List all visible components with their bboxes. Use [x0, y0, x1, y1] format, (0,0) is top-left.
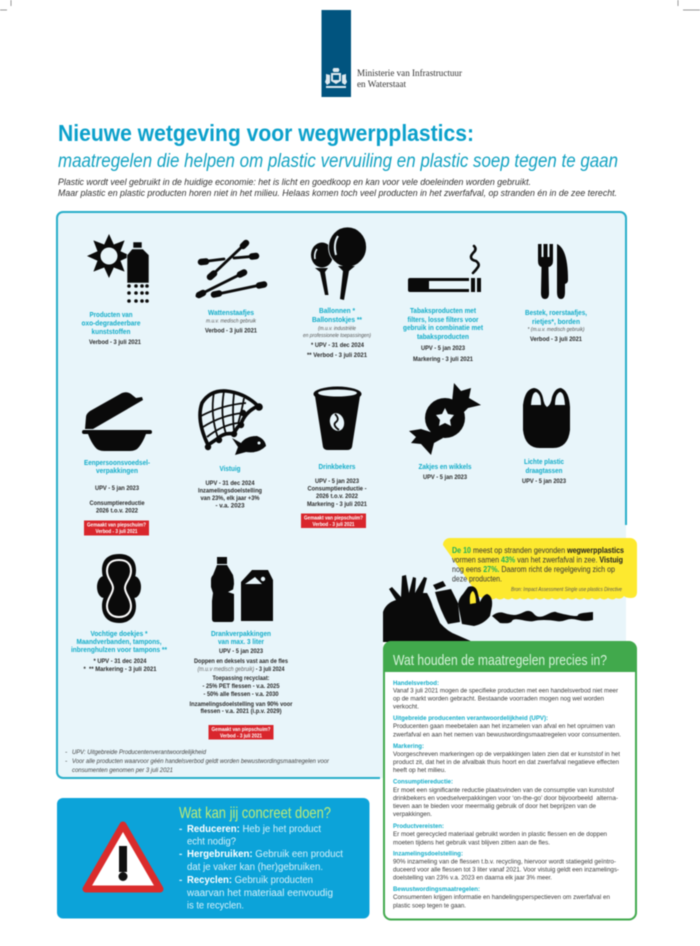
badge: styrofoam ban: Verbod - 3 juli 2021	[220, 734, 262, 740]
label: UPV - 5 jan 2023	[95, 485, 140, 492]
callout: top 10 beach litter: De 10 meest op stranden gevonden wegwerpplastics	[452, 546, 624, 555]
item: fishing gear	[198, 391, 266, 510]
label: tabaksproducten	[417, 332, 469, 341]
label: UPV - 5 jan 2023	[421, 345, 466, 352]
label: Eenpersoonsvoedsel-	[84, 458, 150, 467]
section: awareness measures: plastic soep tegen te gaan.	[393, 902, 466, 910]
icon: warning triangle	[86, 825, 160, 889]
callout: top 10 beach litter	[443, 538, 637, 600]
icon: fork and knife	[538, 244, 568, 299]
badge: styrofoam ban: Gemaakt van piepschuim?	[212, 727, 270, 733]
item: packets and wrappers	[409, 383, 481, 481]
label: kunststoffen	[92, 327, 131, 336]
label: Markering - 3 juli 2021	[307, 501, 368, 508]
section: consumption reduction: tieven aan te bieden voor meermalig gebruik of door het beprijzen van de	[393, 803, 596, 810]
label: - 25% PET flessen - v.a. 2025	[202, 683, 280, 690]
section: product requirements: moeten tijdens het gebruik vast blijven zitten aan de fles.	[393, 840, 550, 846]
action list: echt nodig?	[187, 836, 236, 848]
section: consumption reduction: Er moet een significante reductie plaatsvinden van de consumptie van kunststof	[393, 787, 614, 794]
ministry name: en Waterstaat	[357, 79, 406, 89]
action list: Recyclen: Gebruik producten	[187, 875, 313, 886]
ministry name: Ministerie van Infrastructuur	[357, 68, 462, 78]
badge: styrofoam ban: Gemaakt van piepschuim?	[87, 522, 146, 528]
label: Bestek, roerstaafjes,	[525, 308, 587, 317]
item: oxo-degradable plastics	[82, 234, 149, 346]
action list: dat je vaker kan (her)gebruiken.	[187, 862, 323, 873]
heading: Wat kan jij concreet doen?	[179, 805, 331, 822]
item: wipes and sanitary products	[71, 554, 167, 673]
panel heading: Wat houden de maatregelen precies in?	[393, 652, 607, 669]
item: food containers	[82, 392, 152, 536]
label: Ballonstokjes **	[312, 315, 362, 324]
badge: styrofoam ban	[84, 520, 149, 536]
item: cutlery	[525, 244, 587, 343]
label	[303, 306, 371, 359]
callout: top 10 beach litter: deze producten.	[452, 574, 502, 584]
icon: sanitary pad	[97, 554, 141, 623]
label: oxo-degradeerbare	[82, 318, 140, 328]
icon: cup	[314, 386, 362, 450]
label: Verbod - 3 juli 2021	[89, 339, 142, 346]
section: consumption reduction: Consumptiereductie:	[393, 778, 453, 786]
ministry name	[357, 68, 462, 89]
label: UPV - 5 jan 2023	[315, 478, 360, 485]
label: Ballonnen *	[319, 306, 355, 315]
icon: coat of arms	[325, 68, 347, 88]
action list	[179, 824, 343, 912]
label: en professionele toepassingen)	[303, 333, 371, 339]
label	[522, 457, 567, 485]
label: verpakkingen	[96, 466, 138, 475]
label	[307, 462, 368, 508]
section: awareness measures	[393, 886, 610, 910]
callout: top 10 beach litter: vormen samen 43% van het zwerfafval in zee. Vistuig	[452, 556, 623, 564]
label: Doppen en deksels vast aan de fles	[194, 658, 288, 665]
action list: waarvan het materiaal eenvoudig	[186, 888, 333, 899]
callout: top 10 beach litter: Bron: Impact Assessment Single use plastics Directive	[511, 587, 622, 593]
label: Maandverbanden, tampons,	[76, 637, 162, 646]
item: drinking cups	[301, 386, 368, 528]
panel: what can you do	[57, 798, 370, 918]
section: marking: Voorgeschreven markeringen op de verpakkingen laten zien dat er kunststof in het	[393, 751, 620, 758]
label	[84, 458, 150, 514]
label: Drankverpakkingen	[211, 629, 271, 638]
label: * UPV - 31 dec 2024	[94, 658, 147, 665]
icon: net and fish	[200, 391, 266, 455]
label	[403, 306, 483, 363]
item: plastic carrier bags	[522, 388, 570, 485]
section: awareness measures: Consumenten krijgen informatie en handelingsperspectieven om zwerfafval en	[393, 894, 610, 901]
section: collection target: 90% inzameling van de flessen t.b.v. recycling, hiervoor wordt statiegeld geïntro-	[393, 858, 616, 866]
footnotes: UPV: Uitgebreide Producentenverantwoordelijkheid	[72, 749, 206, 756]
label	[205, 308, 258, 334]
label: Inzamelingsdoelstelling van 90% voor	[190, 701, 293, 708]
label: UPV - 5 jan 2023	[219, 648, 264, 655]
label: ** Verbod - 3 juli 2021	[307, 352, 368, 359]
label: Producten van	[90, 310, 133, 319]
intro text	[58, 176, 617, 198]
label	[190, 629, 293, 715]
label: 2026 t.o.v. 2022	[96, 508, 139, 514]
panel: what the measures mean	[384, 642, 636, 920]
section: trade ban: Handelsverbod:	[393, 680, 439, 687]
footnotes: consumenten genomen per 3 juli 2021	[72, 767, 173, 774]
badge: styrofoam ban: Gemaakt van piepschuim?	[304, 516, 363, 522]
section: extended producer responsibility: zwerfafval en aan het nemen van bewustwordingsmaatregelen voor consumenten.	[393, 732, 621, 738]
item: balloons	[303, 227, 371, 359]
label: * ** Markering - 3 juli 2021	[84, 666, 157, 673]
section: marking: product zit, dat het in de afvalbak thuis hoort en dat zwerfafval negatieve effecten	[393, 759, 619, 766]
badge: styrofoam ban	[208, 725, 274, 740]
section: trade ban: verkocht.	[393, 704, 419, 710]
label: Drinkbekers	[318, 462, 356, 471]
section: consumption reduction: verpakkingen.	[393, 811, 432, 818]
section: awareness measures: Bewustwordingsmaatregelen:	[393, 886, 480, 893]
label: Verbod - 3 juli 2021	[205, 328, 258, 334]
section: extended producer responsibility: Producenten gaan meebetalen aan het inzamelen van afval en het opruimen van	[393, 723, 615, 730]
section: collection target	[393, 850, 619, 882]
icon: cotton buds	[197, 242, 265, 296]
icon: carrier bag	[523, 388, 570, 448]
section: product requirements: Er moet gerecycled materiaal gebruikt worden in plastic flessen en de doppen	[393, 831, 607, 838]
section: trade ban	[393, 680, 619, 710]
label	[198, 464, 262, 510]
section: product requirements	[393, 823, 607, 846]
section: extended producer responsibility	[393, 715, 621, 738]
label: m.u.v. medisch gebruik	[206, 318, 257, 324]
footnotes	[65, 749, 330, 774]
label: - v.a. 2023	[216, 502, 245, 510]
label: Lichte plastic	[524, 457, 564, 466]
label: - 50% alle flessen - v.a. 2030	[204, 691, 279, 698]
section: marking: heeft op het milieu.	[393, 767, 446, 774]
panel: products	[57, 212, 626, 778]
label: Vochtige doekjes *	[90, 629, 148, 638]
icon: candy	[409, 383, 481, 455]
section: extended producer responsibility: Uitgebreide producenten verantwoordelijkheid (UPV):	[393, 715, 548, 722]
action list: Reduceren: Heb je het product	[187, 824, 321, 835]
footnotes: -	[65, 749, 68, 756]
label: UPV - 5 jan 2023	[522, 478, 567, 485]
icon: cigarette	[408, 246, 481, 292]
illustration: plastic litter and waves	[383, 575, 593, 642]
label: Vistuig	[220, 464, 241, 473]
icon: balloons	[311, 227, 366, 300]
section: collection target: Inzamelingsdoelstelling:	[393, 850, 463, 858]
label: 2026 t.o.v. 2022	[316, 493, 359, 500]
action list: -	[179, 849, 182, 860]
label: filters, losse filters voor	[408, 315, 479, 324]
section: consumption reduction: drinkbekers en voedselverpakkingen voor ‘on-the-go’ door bijvoorbeeld alterna-	[393, 795, 618, 802]
label: (m.u.v. industriële	[318, 326, 356, 332]
icon: sun and bottle	[87, 234, 149, 303]
label: UPV - 31 dec 2024	[206, 480, 255, 487]
section: trade ban: Vanaf 3 juli 2021 mogen de specifieke producten met een handelsverbod niet meer	[393, 688, 619, 694]
label: draagtassen	[526, 466, 563, 475]
footnotes: -	[65, 758, 68, 765]
label	[525, 308, 587, 343]
label: Zakjes en wikkels	[418, 462, 472, 471]
label: (m.u.v medisch gebruik) - 3 juli 2024	[198, 666, 285, 673]
label: flessen - v.a. 2021 (i.p.v. 2029)	[200, 708, 282, 715]
label: Tabaksproducten met	[410, 306, 476, 315]
label: Toepassing recyclaat:	[212, 675, 270, 682]
item: beverage containers	[190, 557, 293, 740]
label: inbrenghulzen voor tampons **	[71, 645, 167, 654]
label: * (m.u.v. medisch gebruik)	[528, 327, 585, 333]
label: van max. 3 liter	[218, 637, 264, 646]
badge: styrofoam ban: Verbod - 3 juli 2021	[96, 529, 138, 535]
section: marking: Markering:	[393, 743, 424, 750]
label: Consumptiereductie -	[308, 486, 366, 492]
footnotes: Voor alle producten waarvoor géén handelsverbod geldt worden bewustwordingsmaatregelen voor	[72, 758, 330, 765]
intro text: Maar plastic en plastic producten horen niet in het milieu. Helaas komen toch veel producten in het zwerfafval, op stranden én in de zee terecht.	[58, 187, 617, 198]
section: marking	[393, 743, 620, 774]
logo: ministry of infrastructure	[322, 10, 462, 97]
action list: Hergebruiken: Gebruik een product	[187, 849, 343, 860]
label: Verbod - 3 juli 2021	[530, 336, 583, 343]
label: UPV - 5 jan 2023	[423, 474, 468, 481]
section: product requirements: Productvereisten:	[393, 823, 444, 830]
action list: -	[179, 875, 182, 886]
action list: is te recyclen.	[187, 900, 244, 912]
section: collection target: duceerd voor alle flessen tot 3 liter vanaf 2021. Voor vistuig geldt een inzamelings-	[393, 866, 619, 874]
label: Markering - 3 juli 2021	[413, 356, 474, 363]
label: van 23%, elk jaar +3%	[200, 495, 260, 502]
title: Nieuwe wetgeving voor wegwerpplastics:	[58, 120, 474, 146]
label	[82, 310, 142, 346]
label: rietjes*, borden	[532, 317, 580, 326]
label: * UPV - 31 dec 2024	[311, 342, 365, 349]
label: gebruik in combinatie met	[403, 323, 483, 332]
label	[418, 462, 472, 481]
subtitle: maatregelen die helpen om plastic vervuiling en plastic soep tegen te gaan	[58, 151, 618, 172]
section: collection target: doelstelling van 23% v.a. 2023 en daarna elk jaar 3% meer.	[393, 874, 552, 882]
label	[71, 629, 167, 673]
section: consumption reduction	[393, 778, 618, 818]
badge: styrofoam ban	[301, 514, 366, 528]
section: trade ban: op de markt worden gebracht. Bestaande voorraden mogen nog wel worden	[393, 696, 604, 702]
badge: styrofoam ban: Verbod - 3 juli 2021	[312, 522, 355, 528]
label: Consumptiereductie	[90, 500, 145, 507]
item: tobacco	[403, 246, 483, 363]
callout: top 10 beach litter: nog eens 27%. Daarom richt de regelgeving zich op	[452, 565, 615, 574]
intro text: Plastic wordt veel gebruikt in de huidige economie: het is licht en goedkoop en kan voor vele doeleinden worden gebruikt.	[58, 176, 531, 187]
item: cotton buds	[197, 242, 265, 334]
action list: -	[179, 824, 182, 835]
icon: bottle and carton	[211, 557, 273, 622]
label: Wattenstaafjes	[208, 308, 254, 317]
label: Inzamelingsdoelstelling	[198, 488, 262, 494]
icon: food box	[82, 392, 152, 451]
